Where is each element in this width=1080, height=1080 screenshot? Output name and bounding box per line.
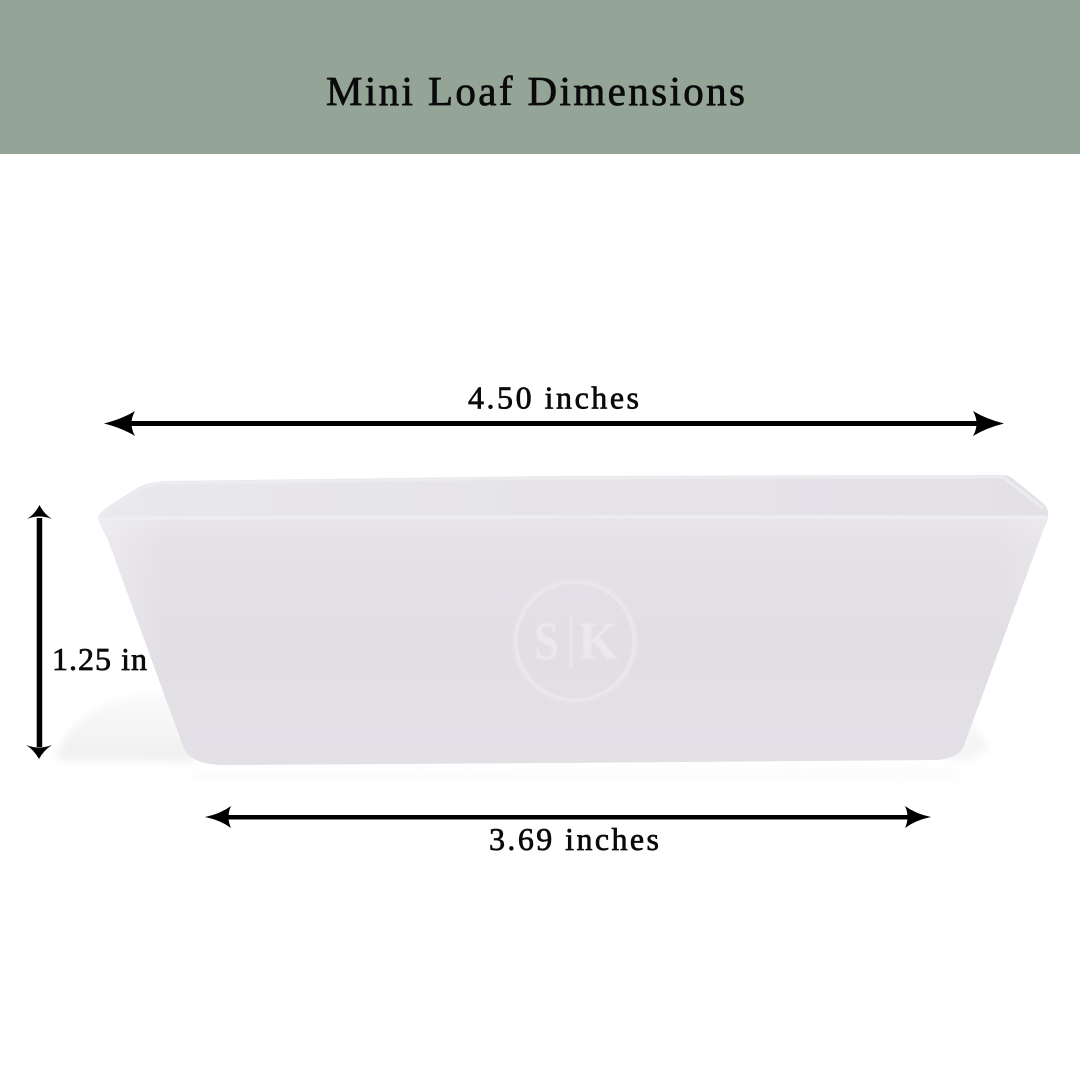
embossed logo: S [534,611,559,671]
label: height: 1.25 in [52,641,147,677]
loaf pan shadow [56,692,990,782]
label: top width: 4.50 inches [468,380,639,416]
arrow: bottom width [205,806,931,828]
arrow: height [26,505,52,759]
header banner [0,0,1080,154]
pan rim highlight [100,516,1046,519]
pan front face [98,516,1048,765]
title: Mini Loaf Dimensions [326,68,745,114]
loaf pan [98,475,1048,765]
embossed logo [513,579,637,703]
pan side light falloff [98,516,1048,765]
pan rim outer highlight [101,477,1043,515]
arrow: top width [104,411,1004,436]
pan interior rim [98,475,1048,524]
embossed logo: K [578,611,618,671]
label: bottom width: 3.69 inches [489,821,659,857]
